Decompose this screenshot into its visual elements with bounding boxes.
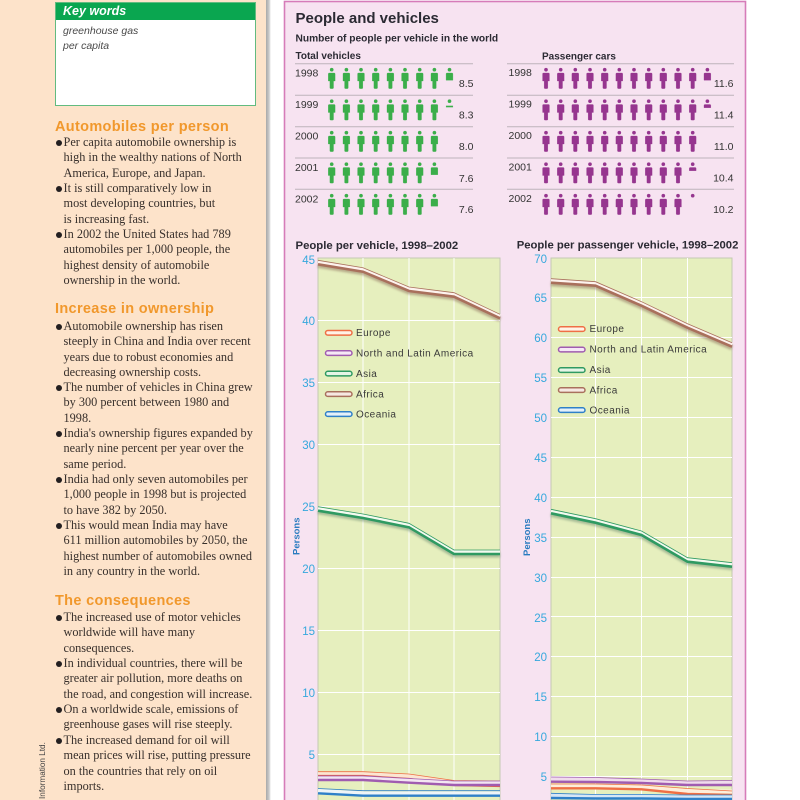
y axis numbers: 45 <box>302 255 315 267</box>
line chart: people per vehicle <box>292 255 500 800</box>
bullet: oil demand: imports. <box>64 779 104 793</box>
bullet: individual countries <box>64 656 252 702</box>
line: North and Latin America <box>318 776 500 785</box>
left column panel <box>0 0 266 800</box>
bullet: per capita ownership: Per capita automobile ownership is <box>64 135 236 149</box>
bullet: developing countries: is increasing fast. <box>64 212 149 226</box>
row 1998: 1998 <box>508 67 532 79</box>
row 2001: 2001 <box>508 162 532 174</box>
gridlines <box>318 258 500 800</box>
row 2000: 2000 <box>508 130 532 142</box>
bullet: China and India <box>64 319 251 380</box>
row 1998: 8.5 <box>459 78 474 90</box>
bullet: developing countries: It is still comparatively low in <box>64 181 211 195</box>
y axis numbers: 10 <box>534 732 547 744</box>
row 2000: 2000 <box>295 130 319 142</box>
bullet: China and India: years due to robust economies and <box>64 350 233 364</box>
gridlines <box>551 258 732 800</box>
bullet: United States <box>64 227 231 288</box>
y axis numbers: 70 <box>534 254 547 266</box>
bullet: vehicles in China <box>64 380 253 426</box>
bullet: oil demand <box>64 733 251 794</box>
row 2001: 2001 <box>295 162 319 174</box>
y axis numbers: 50 <box>534 413 547 425</box>
row 2000: 8.0 <box>459 141 474 153</box>
bullet: oil demand: The increased demand for oil will <box>64 733 230 747</box>
legend: Oceania <box>356 410 396 420</box>
pictogram chart: total vehicles <box>295 51 474 216</box>
row 2002: 2002 <box>508 193 532 205</box>
row 2000 <box>507 127 734 153</box>
y axis numbers <box>534 254 547 784</box>
row 2002: 10.2 <box>713 204 734 216</box>
row 2000 <box>295 127 474 153</box>
key words list <box>62 25 138 52</box>
bullet: India's figures <box>64 426 253 472</box>
bullet: individual countries: greater air pollution, more deaths on <box>64 671 242 685</box>
line: North and Latin America <box>551 777 732 785</box>
key words list: per capita <box>63 40 109 52</box>
heading: total vehicles: Total vehicles <box>296 51 361 62</box>
bullet: individual countries: the road, and congestion will increase. <box>64 687 252 701</box>
panel background <box>284 2 746 800</box>
line: Asia <box>318 507 500 555</box>
y axis numbers: 15 <box>534 692 547 704</box>
y axis numbers <box>302 255 315 762</box>
y axis numbers: 5 <box>541 772 547 784</box>
bullet: India projection: 1,000 people in 1998 but is projected <box>64 487 246 501</box>
row 1999: 8.3 <box>459 110 474 122</box>
bullet: India's figures: same period. <box>64 457 126 471</box>
bullet: many consequences: consequences. <box>64 641 134 655</box>
bullet: developing countries: most developing countries, but <box>64 196 215 210</box>
key words heading: Key words <box>63 4 126 18</box>
bullet: vehicles in China: 1998. <box>64 411 91 425</box>
key words heading <box>56 3 255 20</box>
row 2001 <box>295 158 474 185</box>
row 1999 <box>507 95 734 122</box>
bullet: greenhouse gases: On a worldwide scale, emissions of <box>64 702 238 716</box>
y axis numbers: 40 <box>534 493 547 505</box>
y axis numbers: 60 <box>534 333 547 345</box>
chart title: people per vehicle: People per vehicle, 1998–2002 <box>296 240 458 252</box>
row 1998: 1998 <box>295 68 319 80</box>
legend: Europe <box>356 328 391 339</box>
bullet: India projection: India had only seven automobiles per <box>64 472 248 486</box>
column shadow <box>266 0 271 800</box>
legend: North and Latin America <box>590 344 707 356</box>
bullet: oil demand: on the countries that rely on oil <box>64 764 217 778</box>
legend: Oceania <box>590 406 630 416</box>
row 1998 <box>507 64 734 90</box>
line: Oceania <box>551 793 732 799</box>
key words list: greenhouse gas <box>63 25 138 37</box>
line chart: people per passenger vehicle <box>522 254 732 800</box>
bullet: greenhouse gases: greenhouse gases will rise steeply. <box>64 717 232 731</box>
bullet: per capita ownership <box>64 135 242 181</box>
row 2001: 7.6 <box>459 173 474 185</box>
row 2002: 7.6 <box>459 204 474 216</box>
bullet: 611 million: in any country in the world. <box>64 564 200 578</box>
row 2002 <box>507 189 734 216</box>
heading: increase in ownership: Increase in ownership <box>55 301 214 317</box>
row 1998: 11.6 <box>714 78 734 90</box>
legend: Africa <box>356 390 384 400</box>
y axis numbers: 65 <box>534 293 547 305</box>
row 1999: 11.4 <box>714 110 734 122</box>
subtitle: Number of people per vehicle in the world <box>296 34 498 44</box>
y axis numbers: 25 <box>534 613 547 625</box>
bullet: India projection <box>64 472 248 518</box>
bullet: India projection: to have 382 by 2050. <box>64 503 167 517</box>
legend: North and Latin America <box>356 348 474 360</box>
bullet: India's figures: nearly nine percent per year over the <box>64 441 244 455</box>
key words box <box>55 2 256 106</box>
y axis numbers: 30 <box>302 440 315 452</box>
line: Oceania <box>318 788 500 796</box>
bullet: vehicles in China: The number of vehicles in China grew <box>64 380 253 394</box>
pictogram chart: passenger cars <box>507 52 734 216</box>
panel title: People and vehicles <box>296 10 439 27</box>
row 1999: 1999 <box>508 98 532 110</box>
credit line: Information Ltd. <box>38 742 47 799</box>
legend <box>326 328 474 420</box>
bullet: developing countries <box>64 181 215 227</box>
row 2002: 2002 <box>295 194 319 206</box>
y axis numbers: 45 <box>534 453 547 465</box>
chart title: people per passenger vehicle: People per passenger vehicle, 1998–2002 <box>517 240 738 252</box>
line: Asia <box>551 509 732 568</box>
bullet: oil demand: mean prices will rise, putting pressure <box>64 748 251 762</box>
bullet: per capita ownership: high in the wealthy nations of North <box>64 150 242 164</box>
bullet: 611 million: 611 million automobiles by 2050, the <box>64 533 248 547</box>
y axis numbers: 5 <box>309 750 315 762</box>
y axis numbers: 20 <box>302 564 315 576</box>
y axis numbers: 25 <box>302 502 315 514</box>
legend: Asia <box>356 369 377 380</box>
y axis numbers: 20 <box>534 652 547 664</box>
legend <box>558 324 707 416</box>
bullet: greenhouse gases <box>64 702 238 733</box>
bullet: United States: automobiles per 1,000 people, the <box>64 242 230 256</box>
plot area <box>318 258 500 800</box>
legend: Asia <box>590 365 611 376</box>
bullet: 611 million <box>64 518 252 579</box>
bullet: China and India: decreasing ownership costs. <box>64 365 201 379</box>
row 1998 <box>295 64 474 90</box>
bullet: per capita ownership: America, Europe, and Japan. <box>64 166 206 180</box>
bullet: India's figures: India's ownership figures expanded by <box>64 426 253 440</box>
y axis label: Persons <box>522 518 533 556</box>
row 2000: 11.0 <box>714 141 734 153</box>
bullet: 611 million: highest number of automobiles owned <box>64 549 252 563</box>
row 1999: 1999 <box>295 99 319 111</box>
bullet: United States: In 2002 the United States had 789 <box>64 227 231 241</box>
row 2002 <box>295 189 474 216</box>
bullet: China and India: Automobile ownership has risen <box>64 319 223 333</box>
y axis numbers: 15 <box>302 626 315 638</box>
line: Africa <box>551 279 732 348</box>
legend: Europe <box>590 324 624 335</box>
bullet: many consequences: The increased use of motor vehicles <box>64 610 241 624</box>
legend: Africa <box>590 386 618 396</box>
row 2001 <box>507 158 734 184</box>
y axis numbers: 35 <box>302 378 315 390</box>
bullet: many consequences <box>64 610 241 656</box>
y axis numbers: 40 <box>302 316 315 328</box>
bullet: many consequences: worldwide will have many <box>64 625 195 639</box>
row 1999 <box>295 95 474 122</box>
y axis numbers: 10 <box>302 688 315 700</box>
bullet: China and India: steeply in China and India over recent <box>64 334 251 348</box>
bullet: United States: ownership in the world. <box>64 273 180 287</box>
bullet: United States: highest density of automobile <box>64 258 209 272</box>
plot area <box>551 258 732 800</box>
heading: the consequences: The consequences <box>55 593 191 609</box>
heading: passenger cars: Passenger cars <box>542 52 616 62</box>
y axis label: Persons <box>292 518 302 555</box>
y axis numbers: 35 <box>534 533 547 545</box>
row 2001: 10.4 <box>713 172 734 184</box>
bullet: individual countries: In individual countries, there will be <box>64 656 242 670</box>
y axis numbers: 55 <box>534 373 547 385</box>
line: Africa <box>318 260 500 319</box>
heading: automobiles per person: Automobiles per person <box>55 119 229 135</box>
line: Europe <box>551 784 732 795</box>
bullet: vehicles in China: by 300 percent between 1980 and <box>64 395 229 409</box>
bullet: 611 million: This would mean India may have <box>64 518 228 532</box>
y axis numbers: 30 <box>534 573 547 585</box>
line: Europe <box>318 772 500 786</box>
